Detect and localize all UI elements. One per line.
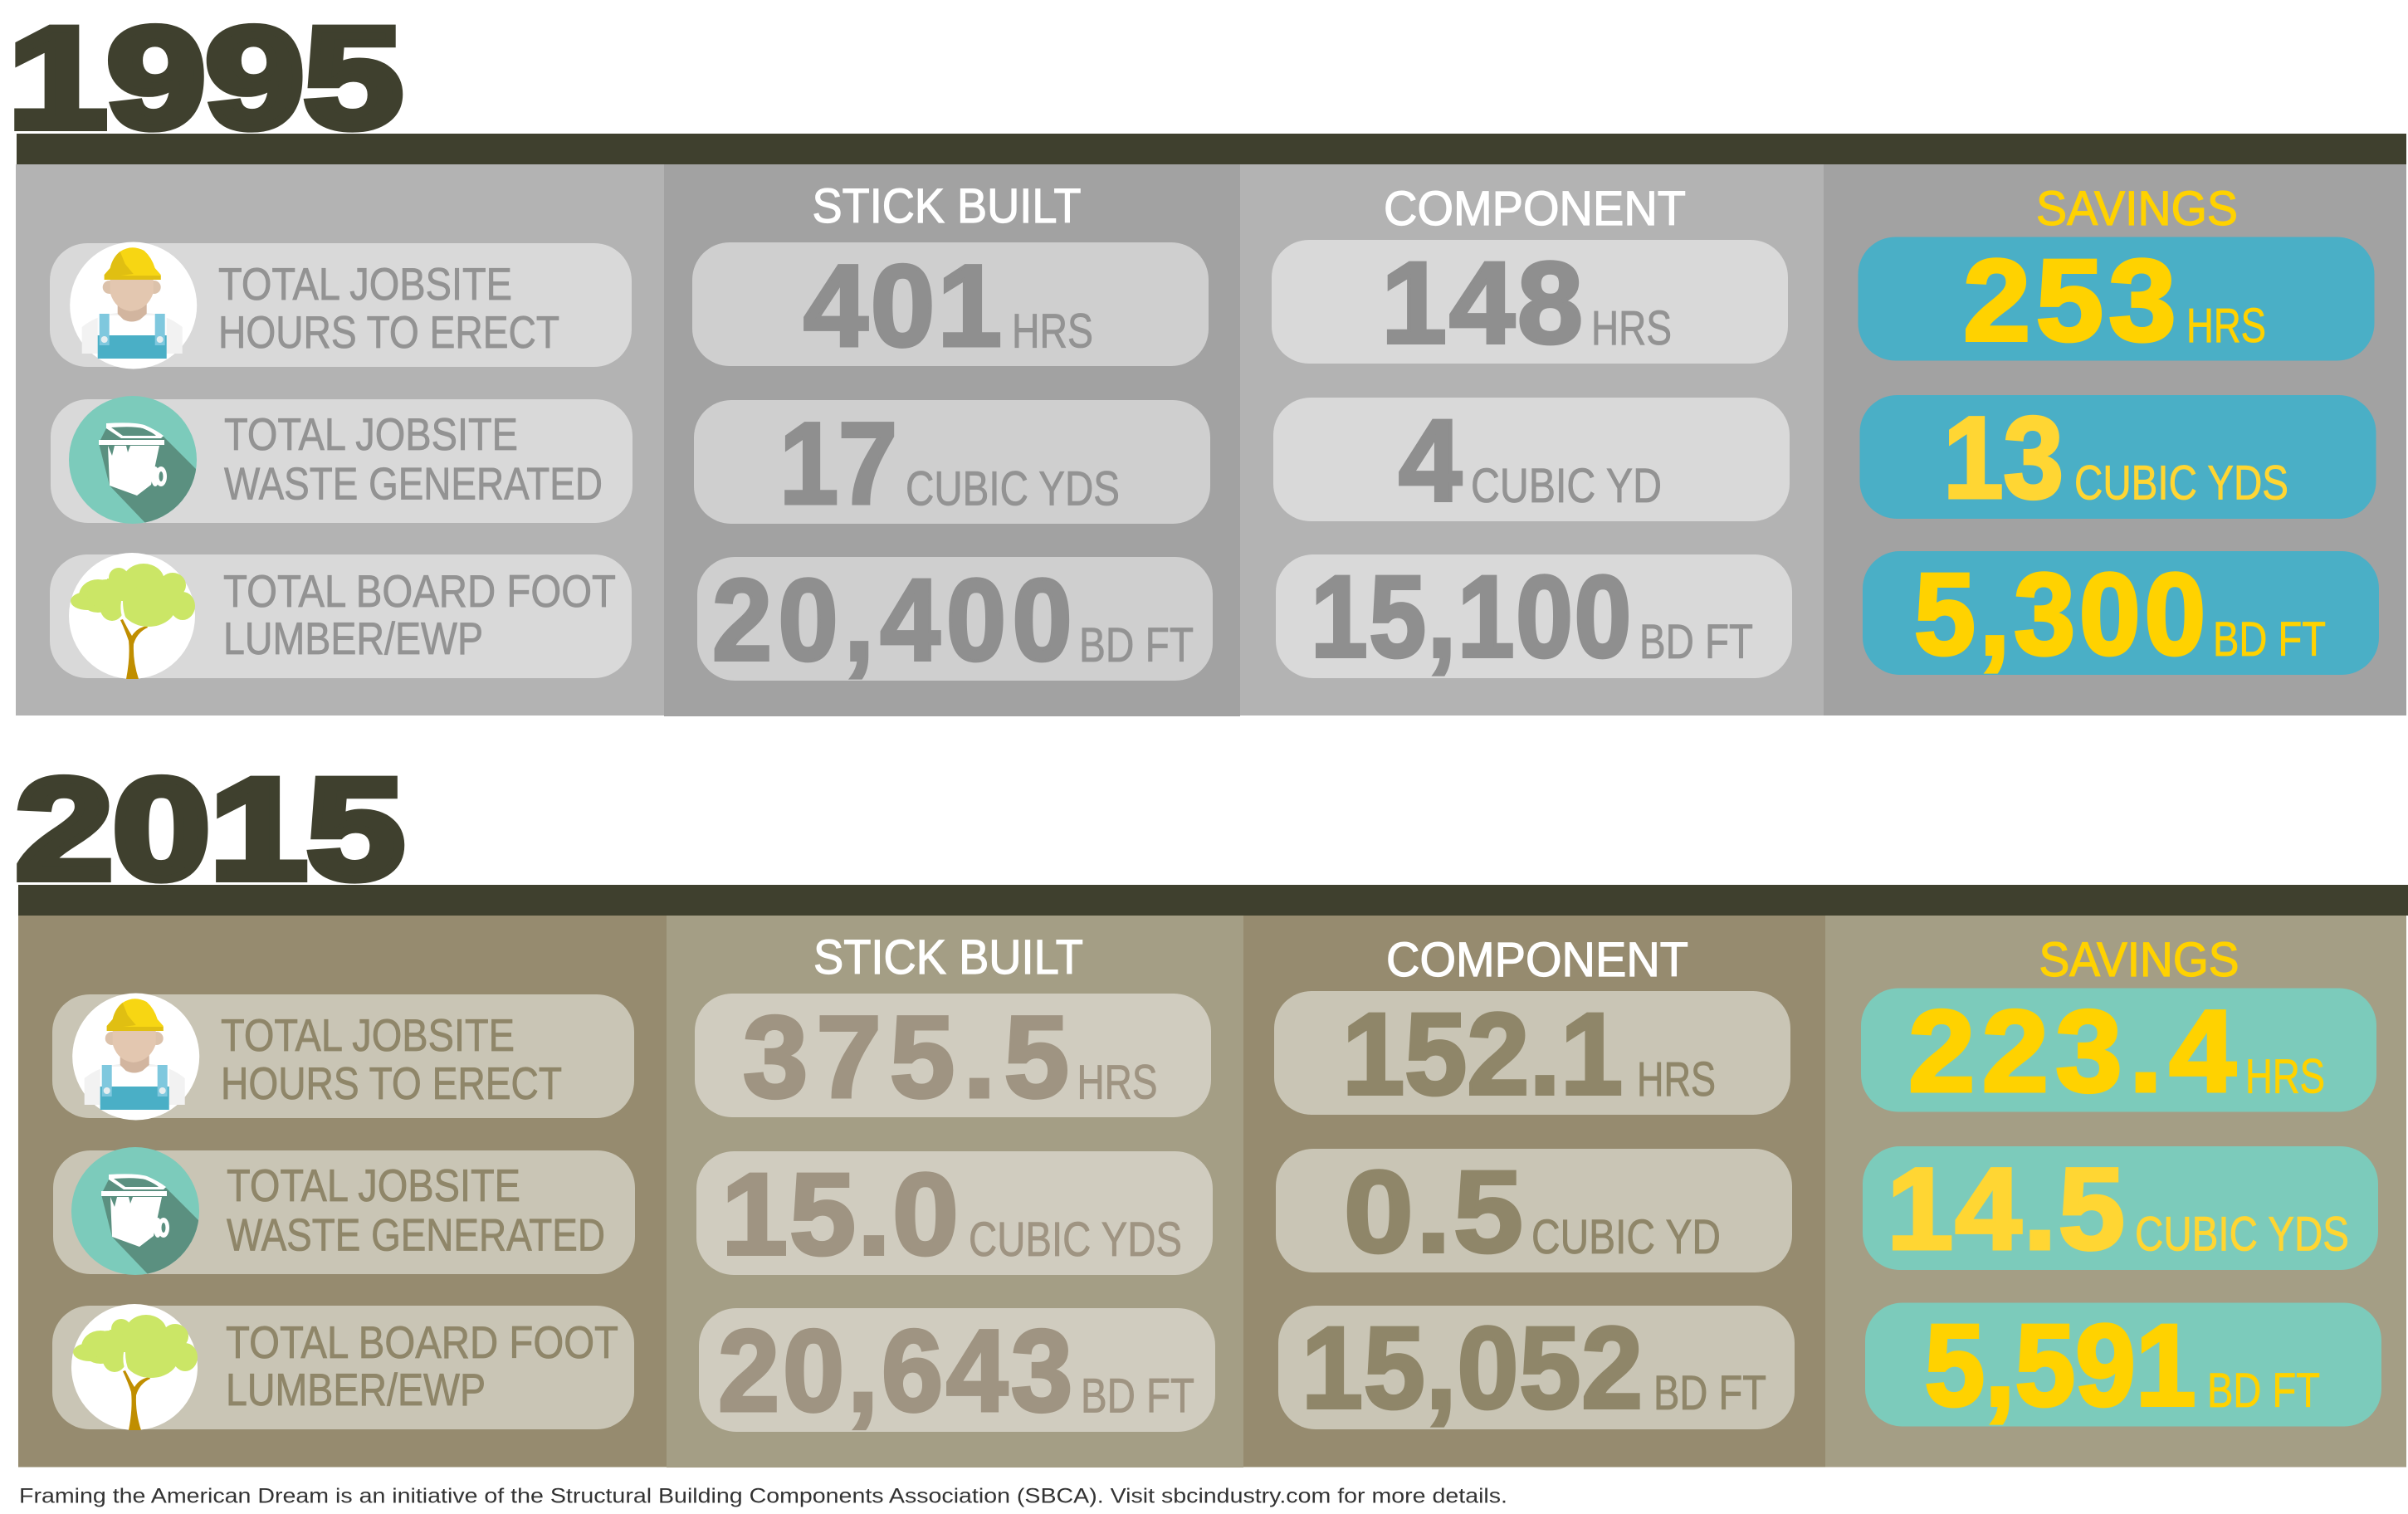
panel: stick built 1995: [664, 164, 1240, 716]
stat: 253 hrs: 253: [1963, 235, 2181, 365]
stat: 375.5 hrs: 375.5: [743, 991, 1077, 1122]
stat: 15,100 bd ft: BD FT: [1639, 615, 1753, 669]
stat: 13 cubic yds: 13: [1943, 392, 2064, 523]
label pill: waste: WASTE GENERATED: [224, 458, 603, 510]
heading: stick built: STICK BUILT: [813, 930, 1083, 984]
stat: 14.5 cubic yds: [1863, 1144, 2378, 1273]
stat: 253 hrs: [1858, 235, 2374, 365]
stat: 15,052 bd ft: 15,052: [1302, 1302, 1644, 1433]
label pill: waste: WASTE GENERATED: [227, 1209, 605, 1260]
stat: 14.5 cubic yds: CUBIC YDS: [2135, 1207, 2349, 1262]
icon: tree: [69, 553, 195, 679]
stat: 15.0 cubic yds: [696, 1149, 1213, 1279]
stat: 14.5 cubic yds: 14.5: [1887, 1144, 2127, 1273]
label pill: lumber: LUMBER/EWP: [223, 613, 483, 664]
stat: 15,052 bd ft: BD FT: [1653, 1366, 1766, 1420]
stat: 223.4 hrs: 223.4: [1908, 986, 2243, 1116]
stat: 20,643 bd ft: BD FT: [1081, 1370, 1194, 1423]
panel: stick built 2015: [667, 916, 1243, 1468]
stat: 15,100 bd ft: 15,100: [1311, 551, 1633, 681]
year heading: 2015: 2015: [16, 750, 404, 909]
stat: 375.5 hrs: HRS: [1077, 1056, 1157, 1109]
panel: row labels 1995: [16, 164, 664, 715]
stat: 15,052 bd ft: [1278, 1302, 1795, 1433]
header bar 1995: [17, 134, 2406, 164]
label pill: jobsite hours: [52, 994, 634, 1118]
section: 1995: [8, 0, 2406, 716]
heading: stick built: STICK BUILT: [812, 179, 1081, 233]
stat: 148 hrs: 148: [1381, 237, 1585, 368]
icon: waste bin: [71, 1147, 199, 1275]
stat: 17 cubic yds: [694, 398, 1210, 528]
stat: 401 hrs: HRS: [1012, 304, 1093, 359]
panel: component 1995: [1240, 164, 1824, 715]
stat: 148 hrs: [1272, 237, 1788, 368]
label pill: waste: [51, 399, 633, 523]
stat: 5,300 bd ft: [1863, 549, 2379, 679]
header bar 2015: [18, 885, 2408, 916]
label pill: jobsite hours: [50, 243, 632, 367]
icon: tree: [71, 1304, 198, 1430]
label pill: jobsite hours: TOTAL JOBSITE: [221, 1009, 515, 1061]
stat: 152.1 hrs: [1274, 989, 1790, 1119]
stat: 0.5 cubic yd: [1276, 1146, 1792, 1277]
stat: 4 cubic yd: 4: [1399, 395, 1462, 525]
stat: 0.5 cubic yd: CUBIC YD: [1531, 1210, 1721, 1264]
stat: 20,400 bd ft: 20,400: [712, 554, 1078, 685]
stat: 253 hrs: HRS: [2186, 299, 2266, 353]
stat: 5,300 bd ft: 5,300: [1914, 549, 2210, 679]
stat: 17 cubic yds: 17: [779, 398, 897, 528]
panel: row labels 2015: [18, 916, 667, 1468]
year heading: 1995: 1995: [8, 0, 403, 158]
label pill: lumber: TOTAL BOARD FOOT: [226, 1316, 618, 1368]
stat: 13 cubic yds: CUBIC YDS: [2074, 457, 2288, 510]
stat: 152.1 hrs: 152.1: [1342, 989, 1623, 1119]
label pill: jobsite hours: HOURS TO ERECT: [221, 1057, 562, 1109]
stat: 20,643 bd ft: 20,643: [718, 1305, 1076, 1436]
stat: 375.5 hrs: [695, 991, 1211, 1122]
stat: 152.1 hrs: HRS: [1637, 1052, 1716, 1106]
stat: 148 hrs: HRS: [1591, 301, 1672, 355]
label pill: waste: [53, 1150, 635, 1274]
stat: 4 cubic yd: CUBIC YD: [1471, 459, 1662, 513]
stat: 20,400 bd ft: BD FT: [1079, 618, 1194, 672]
stat: 13 cubic yds: [1859, 392, 2376, 523]
label pill: lumber: LUMBER/EWP: [226, 1364, 486, 1415]
icon: construction worker: [72, 993, 199, 1121]
stat: 0.5 cubic yd: 0.5: [1344, 1146, 1526, 1277]
heading: component: COMPONENT: [1384, 182, 1686, 236]
section: 2015: [16, 750, 2408, 1468]
stat: 5,300 bd ft: BD FT: [2213, 613, 2326, 667]
stat: 401 hrs: [692, 241, 1209, 370]
stat: 15.0 cubic yds: CUBIC YDS: [969, 1213, 1182, 1267]
panel: savings 1995: [1824, 164, 2406, 715]
label pill: waste: TOTAL JOBSITE: [224, 408, 518, 460]
stat: 15.0 cubic yds: 15.0: [721, 1149, 960, 1279]
footer note: Framing the American Dream is an initiative of the Structural Building Components Association (SBCA). Visit sbcindustry.com for more details.: [19, 1484, 1507, 1507]
label pill: waste: TOTAL JOBSITE: [227, 1160, 520, 1211]
stat: 5,591 bd ft: [1865, 1300, 2381, 1430]
stat: 17 cubic yds: CUBIC YDS: [906, 462, 1120, 516]
stat: 223.4 hrs: [1861, 986, 2376, 1116]
panel: component 2015: [1243, 916, 1825, 1468]
label pill: jobsite hours: TOTAL JOBSITE: [218, 258, 512, 310]
icon: construction worker: [70, 242, 197, 369]
label pill: lumber: TOTAL BOARD FOOT: [223, 565, 616, 617]
stat: 223.4 hrs: HRS: [2245, 1049, 2325, 1104]
stat: 401 hrs: 401: [803, 241, 1004, 370]
heading: savings: SAVINGS: [2036, 182, 2238, 236]
heading: savings: SAVINGS: [2039, 933, 2239, 987]
panel: savings 2015: [1825, 916, 2406, 1468]
label pill: lumber: [52, 1306, 634, 1429]
label pill: jobsite hours: HOURS TO ERECT: [218, 306, 559, 358]
stat: 4 cubic yd: [1273, 395, 1790, 525]
icon: waste bin: [69, 396, 197, 524]
stat: 5,591 bd ft: BD FT: [2207, 1364, 2320, 1418]
stat: 5,591 bd ft: 5,591: [1924, 1300, 2196, 1430]
heading: component: COMPONENT: [1386, 933, 1688, 987]
label pill: lumber: [50, 554, 632, 678]
